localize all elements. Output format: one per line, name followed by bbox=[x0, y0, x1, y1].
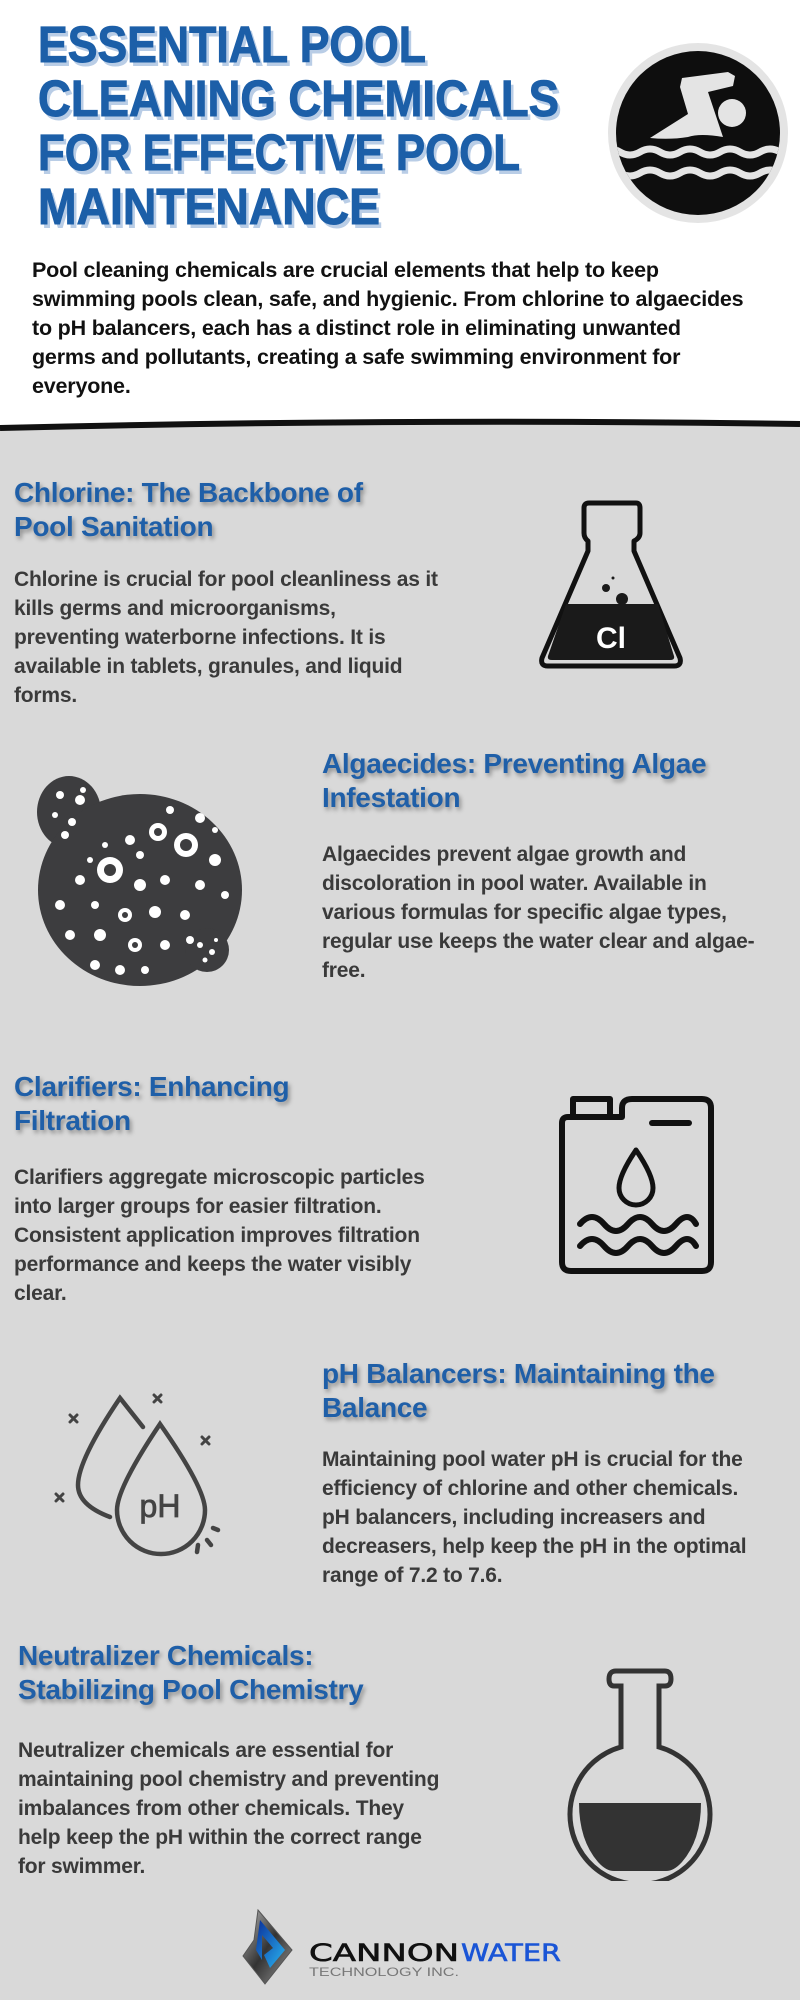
text: neutralizer bbox=[18, 1739, 439, 1878]
text: ph balancers: Maintaining pool water pH is crucial for the bbox=[322, 1448, 743, 1471]
text: ph balancers bbox=[322, 1448, 746, 1587]
panel: algaecides bbox=[37, 748, 754, 986]
text: algaecides: discoloration in pool water. Available in bbox=[322, 872, 707, 895]
intro text: everyone. bbox=[32, 374, 131, 398]
heading: neutralizer: Stabilizing Pool Chemistry bbox=[18, 1674, 363, 1705]
heading: chlorine bbox=[14, 477, 367, 542]
panel: clarifiers bbox=[14, 1071, 714, 1305]
text: algaecides: free. bbox=[322, 959, 365, 982]
title: FOR EFFECTIVE POOL bbox=[41, 128, 523, 185]
heading: clarifiers bbox=[14, 1071, 292, 1136]
heading: clarifiers: Clarifiers: Enhancing bbox=[14, 1071, 289, 1102]
text: algaecides: various formulas for specific algae types, bbox=[322, 901, 727, 924]
text: neutralizer: help keep the pH within the correct range bbox=[18, 1826, 422, 1849]
title: ESSENTIAL POOL bbox=[41, 20, 429, 77]
heading: chlorine: Pool Sanitation bbox=[14, 511, 213, 542]
icon: jug bbox=[559, 1096, 714, 1274]
icon: ph drops: pH bbox=[140, 1488, 180, 1524]
panel: ph balancers bbox=[54, 1358, 746, 1587]
icon: swimmer bbox=[608, 43, 788, 223]
intro text: swimming pools clean, safe, and hygienic. From chlorine to algaecides bbox=[32, 287, 743, 311]
text: chlorine: forms. bbox=[14, 684, 77, 707]
intro text: germs and pollutants, creating a safe swimming environment for bbox=[32, 345, 680, 369]
icon: chlorine flask bbox=[539, 500, 683, 668]
text: clarifiers: clear. bbox=[14, 1282, 67, 1305]
heading: neutralizer bbox=[18, 1640, 367, 1710]
text: algaecides: Algaecides prevent algae growth and bbox=[322, 843, 686, 866]
heading: algaecides: Algaecides: Preventing Algae bbox=[322, 748, 706, 779]
intro text: Pool cleaning chemicals are crucial elements that help to keep bbox=[32, 258, 659, 282]
panel: neutralizer bbox=[18, 1640, 712, 1881]
text: clarifiers bbox=[14, 1166, 425, 1305]
icon: ph drops bbox=[54, 1393, 220, 1556]
text: ph balancers: decreasers, help keep the pH in the optimal bbox=[322, 1535, 746, 1558]
title: FOR EFFECTIVE POOL bbox=[38, 124, 520, 181]
text: chlorine: kills germs and microorganisms, bbox=[14, 597, 336, 620]
heading: clarifiers: Filtration bbox=[14, 1105, 131, 1136]
logo: CANNON bbox=[309, 1939, 459, 1967]
text: chlorine bbox=[14, 568, 438, 707]
text: neutralizer: for swimmer. bbox=[18, 1855, 145, 1878]
text: chlorine: available in tablets, granules, and liquid bbox=[14, 655, 402, 678]
heading: algaecides bbox=[322, 748, 710, 813]
text: neutralizer: Neutralizer chemicals are essential for bbox=[18, 1739, 393, 1762]
text: neutralizer: maintaining pool chemistry and preventing bbox=[18, 1768, 439, 1791]
heading: chlorine: Chlorine: The Backbone of bbox=[14, 477, 363, 508]
text: algaecides bbox=[322, 843, 754, 982]
title: MAINTENANCE bbox=[41, 182, 383, 239]
text: ph balancers: range of 7.2 to 7.6. bbox=[322, 1564, 502, 1587]
heading: ph balancers: pH Balancers: Maintaining the bbox=[322, 1358, 715, 1389]
logo bbox=[242, 1909, 561, 1985]
header background bbox=[0, 0, 800, 431]
text: clarifiers: Clarifiers aggregate microscopic particles bbox=[14, 1166, 425, 1189]
text: ph balancers: efficiency of chlorine and other chemicals. bbox=[322, 1477, 738, 1500]
title: ESSENTIAL POOL bbox=[38, 16, 426, 73]
icon: chlorine flask: Cl bbox=[596, 622, 626, 655]
heading: ph balancers bbox=[322, 1358, 718, 1423]
logo: WATER bbox=[461, 1939, 561, 1967]
intro text: to pH balancers, each has a distinct role in eliminating unwanted bbox=[32, 316, 681, 340]
heading: neutralizer: Neutralizer Chemicals: bbox=[18, 1640, 313, 1671]
logo: TECHNOLOGY INC. bbox=[309, 1965, 459, 1979]
text: neutralizer: imbalances from other chemicals. They bbox=[18, 1797, 404, 1820]
text: clarifiers: performance and keeps the water visibly bbox=[14, 1253, 411, 1276]
text: clarifiers: into larger groups for easier filtration. bbox=[14, 1195, 382, 1218]
intro text bbox=[32, 258, 743, 398]
text: chlorine: Chlorine is crucial for pool cleanliness as it bbox=[14, 568, 438, 591]
text: ph balancers: pH balancers, including increasers and bbox=[322, 1506, 705, 1529]
heading: ph balancers: Balance bbox=[322, 1392, 427, 1423]
panel: chlorine bbox=[14, 477, 683, 707]
text: chlorine: preventing waterborne infections. It is bbox=[14, 626, 385, 649]
text: clarifiers: Consistent application improves filtration bbox=[14, 1224, 420, 1247]
heading: algaecides: Infestation bbox=[322, 782, 460, 813]
title: MAINTENANCE bbox=[38, 178, 380, 235]
icon: round flask bbox=[567, 1668, 712, 1881]
icon: algae cells bbox=[37, 776, 242, 986]
title bbox=[38, 16, 562, 239]
text: algaecides: regular use keeps the water clear and algae- bbox=[322, 930, 754, 953]
